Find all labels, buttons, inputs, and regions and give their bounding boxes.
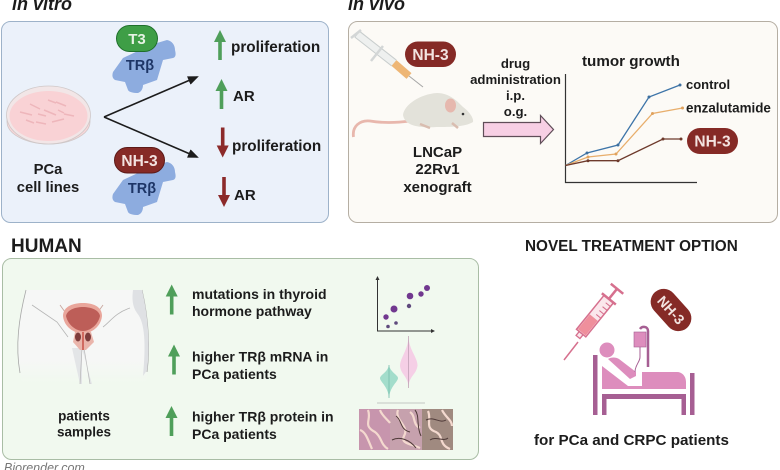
finding: higher TRβ protein: PCa patients <box>192 426 277 442</box>
line: NH-3 <box>566 138 682 166</box>
icon: T3 bound to TRβ <box>112 26 176 93</box>
icon: pink syringe <box>564 283 624 360</box>
arrow: drug administration <box>484 116 554 144</box>
label: enzalutamide: enzalutamide <box>686 100 771 116</box>
NH-3 pill <box>405 42 456 67</box>
outcome: proliferation up <box>214 30 320 60</box>
outcome: AR down <box>218 177 256 207</box>
icon: syringe <box>351 30 423 87</box>
finding: higher TRβ protein <box>166 406 334 442</box>
text: patients samples: patients <box>58 408 110 424</box>
line: enzalutamide <box>566 106 684 166</box>
arrow: to NH-3 outcomes <box>104 117 197 157</box>
heading: novel treatment option: NOVEL TREATMENT OPTION <box>525 238 738 255</box>
NH-3 rotated pill: NH-3 <box>654 293 688 328</box>
label: control: control <box>686 77 730 92</box>
NH-3 pill: NH-3 <box>412 47 449 64</box>
icon: petri dish <box>6 86 90 144</box>
finding: higher TRβ mRNA: PCa patients <box>192 366 277 382</box>
text: PCa cell lines: PCa <box>34 162 63 178</box>
icon: NH-3 bound to TRβ: TRβ <box>128 181 156 197</box>
panel: in vitro <box>2 22 328 222</box>
finding: mutations in thyroid hormone pathway <box>166 284 327 319</box>
icon: prostate anatomy <box>18 290 149 384</box>
finding: higher TRβ mRNA <box>168 344 328 382</box>
text: drug administration: drug <box>501 56 530 71</box>
outcome: AR down: AR <box>234 187 256 204</box>
NH-3 pill label <box>687 128 738 154</box>
outcome: proliferation down <box>217 128 321 158</box>
text: drug administration: administration <box>470 72 561 87</box>
panel: human <box>2 258 478 460</box>
outcome: AR up <box>216 79 255 109</box>
text: drug administration: o.g. <box>504 104 527 119</box>
icon: patient in hospital bed <box>593 327 694 415</box>
chart axes <box>566 74 697 182</box>
icon: T3 bound to TRβ: T3 <box>128 31 146 48</box>
outcome: AR up: AR <box>233 88 255 105</box>
text: PCa cell lines: cell lines <box>17 180 79 196</box>
chart title: tumor growth <box>582 53 680 70</box>
finding: higher TRβ mRNA: higher TRβ mRNA in <box>192 348 328 364</box>
image: tissue histology <box>359 409 453 450</box>
text: drug administration: i.p. <box>506 88 525 103</box>
chart: tumor growth <box>566 53 771 182</box>
icon: NH-3 bound to TRβ <box>112 148 176 215</box>
chart: violin plot <box>377 336 425 403</box>
text: LNCaP 22Rv1 xenograft: xenograft <box>403 179 472 196</box>
icon: mouse <box>353 93 473 137</box>
heading: HUMAN: HUMAN <box>11 236 82 257</box>
NH-3 rotated pill <box>645 283 697 337</box>
text: patients samples: samples <box>57 424 111 440</box>
chart: scatter plot <box>376 276 435 333</box>
finding: higher TRβ protein: higher TRβ protein in <box>192 408 334 424</box>
text: for PCa and CRPC patients: for PCa and CRPC patients <box>534 432 729 449</box>
outcome: proliferation down: proliferation <box>232 138 321 155</box>
line: control <box>566 84 682 166</box>
arrow: to T3 outcomes <box>104 77 197 117</box>
finding: mutations in thyroid hormone pathway: mutations in thyroid <box>192 286 327 302</box>
outcome: proliferation up: proliferation <box>231 39 320 56</box>
text: LNCaP 22Rv1 xenograft: LNCaP <box>413 144 462 161</box>
icon: T3 bound to TRβ: TRβ <box>126 58 154 74</box>
panel: in vivo <box>348 22 778 222</box>
icon: NH-3 bound to TRβ: NH-3 <box>121 153 158 170</box>
finding: mutations in thyroid hormone pathway: hormone pathway <box>192 303 312 319</box>
NH-3 pill label: NH-3 <box>694 134 731 150</box>
text: LNCaP 22Rv1 xenograft: 22Rv1 <box>415 161 460 178</box>
